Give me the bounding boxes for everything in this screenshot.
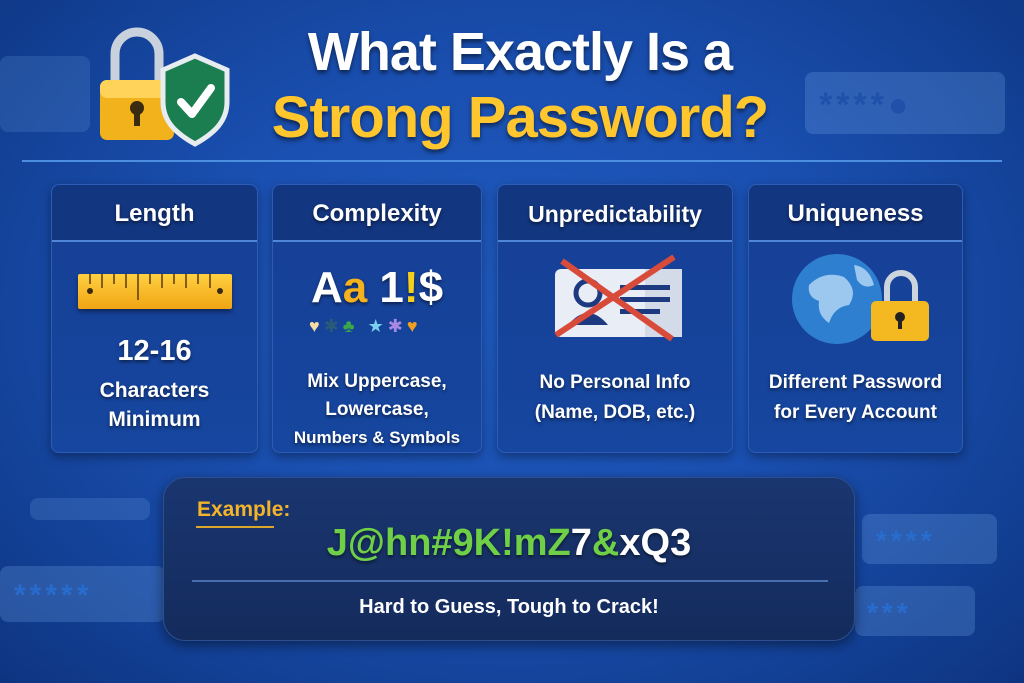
background decoration: envelope left: [0, 56, 90, 132]
panel: length: [51, 184, 258, 453]
example password: J@hn#9K!mZ7&xQ3: [327, 522, 691, 564]
text: mix: Mix Uppercase,: [307, 371, 447, 392]
text: different password: Different Password: [769, 372, 942, 393]
panel: uniqueness: [748, 184, 963, 453]
background decoration: password field bottom left: *****: [14, 579, 92, 612]
text: no personal info: No Personal Info: [540, 372, 690, 393]
background decoration: key: [30, 498, 150, 520]
panel: complexity: ♥✱♣ ★✱♥: [309, 316, 422, 336]
background decoration: password field right: [805, 72, 1005, 134]
icon: globe with lock: [792, 254, 929, 344]
text: different password: [768, 372, 943, 426]
title: Strong Password?: [272, 85, 768, 150]
panel: unpredictability: [497, 184, 733, 453]
icon: characters: Aa 1!$: [311, 263, 443, 312]
text: no personal info: [534, 372, 696, 426]
label: example: Example:: [197, 498, 290, 521]
divider: [22, 160, 1002, 162]
panel: uniqueness: Uniqueness: [787, 200, 924, 227]
text: mix: Lowercase,: [325, 399, 429, 420]
panel: complexity: Complexity: [312, 200, 442, 227]
icon: ruler: [78, 274, 232, 309]
background decoration: password fields bottom right: ****: [876, 525, 936, 556]
title: [272, 22, 768, 156]
title: What Exactly Is a: [308, 22, 732, 82]
panel: length: Minimum: [108, 408, 201, 431]
icon: crossed ID card: [554, 254, 682, 342]
tagline: Hard to Guess, Tough to Crack!: [359, 596, 659, 618]
background decoration: password field bottom left: [0, 566, 165, 622]
text: mix: Numbers & Symbols: [294, 428, 460, 447]
text: 12-16 characters: 12-16: [117, 335, 192, 367]
panel: length: Length: [114, 200, 194, 227]
text: mix: [293, 371, 461, 450]
icon: padlock with shield: [100, 28, 230, 147]
background decoration: password fields bottom right: [862, 514, 997, 564]
callout: example: [163, 477, 855, 641]
panel: complexity: [272, 184, 482, 453]
background decoration: password field right: ****●: [819, 86, 912, 124]
text: ***: [867, 597, 912, 628]
text: no personal info: (Name, DOB, etc.): [535, 402, 695, 423]
text: different password: for Every Account: [774, 402, 937, 423]
panel: unpredictability: Unpredictability: [528, 201, 702, 227]
panel: length: Characters: [100, 379, 209, 402]
